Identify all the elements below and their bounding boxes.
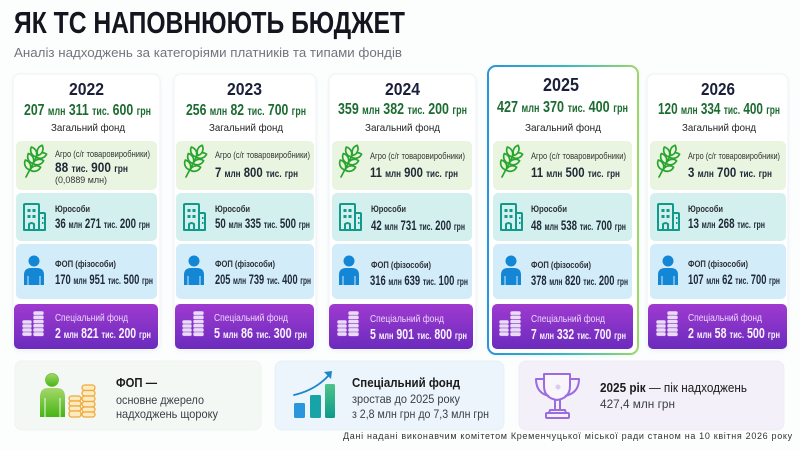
row: legal entities 2025 [493,193,632,241]
row: special fund 2022 [14,304,158,349]
panel: year 2026 [647,74,788,350]
total 2022: 207 млн 311 тис. 600 грн [24,102,151,119]
callout text: Спеціальний фонд [352,376,460,390]
panel: year 2024 [329,74,476,350]
general fund label: Загальний фонд [51,122,125,134]
row: special fund 2026: 2 млн 58 тис. 500 грн [688,325,780,342]
year heading 2024: 2024 [385,79,420,99]
total 2026: 120 млн 334 тис. 400 грн [658,101,780,118]
row: legal entities 2024: Юрособи [371,204,406,215]
row: sole proprietors 2024: ФОП (фізособи) [371,260,431,271]
year heading 2022: 2022 [69,79,104,99]
callout text [600,381,747,411]
callout text: зростав до 2025 року [352,392,460,406]
row: special fund 2026 [648,304,787,349]
row: agro 2026 [650,141,786,190]
row: sole proprietors 2022: ФОП (фізособи) [55,259,116,270]
row: sole proprietors 2023: 205 млн 739 тис. 400 грн [215,271,311,287]
row: agro 2026: 3 млн 700 тис. грн [688,164,772,180]
row: sole proprietors 2023 [176,244,314,299]
callout: 2025 peak [519,361,784,430]
row: special fund 2024: 5 млн 901 тис. 800 грн [370,326,467,343]
general fund label: Загальний фонд [365,122,440,134]
total 2024: 359 млн 382 тис. 200 грн [338,101,467,118]
row: sole proprietors 2025: 378 млн 820 тис. 200 грн [531,272,628,288]
row: sole proprietors 2026: ФОП (фізособи) [688,259,748,270]
callout text [352,376,489,421]
row: special fund 2024: Спеціальний фонд [370,313,444,325]
row: legal entities 2023 [176,193,314,241]
callout text: надходжень щороку [116,407,218,421]
row: sole proprietors 2026 [650,244,786,299]
row: legal entities 2022: 36 млн 271 тис. 200 грн [55,215,150,231]
row: agro 2025: 11 млн 500 тис. грн [531,164,620,180]
row: legal entities 2024: 42 млн 731 тис. 200 грн [371,217,465,233]
year heading 2023: 2023 [227,79,262,99]
row: agro 2022: (0,0889 млн) [55,175,107,186]
row: agro 2024: 11 млн 900 тис. грн [370,164,458,180]
row: sole proprietors 2024: 316 млн 639 тис. 100 грн [370,272,468,288]
row: agro 2023: Агро (с/г товаровиробники) [215,150,310,161]
row: special fund 2025: Спеціальний фонд [531,313,605,325]
total 2025: 427 млн 370 тис. 400 грн [497,99,628,116]
panel: year 2022 [13,74,160,350]
row: legal entities 2022 [16,193,157,241]
icon: person with coins [40,374,95,417]
general fund label: Загальний фонд [209,122,283,134]
row: sole proprietors 2024 [332,244,472,299]
year heading 2025: 2025 [543,74,579,95]
general fund label: Загальний фонд [525,122,601,134]
row: agro 2023 [176,141,314,190]
subtitle: Аналіз надходжень за категоріями платників та типами фондів [14,45,402,60]
callout text [116,376,218,421]
row: sole proprietors 2025: ФОП (фізособи) [531,260,591,271]
total 2023: 256 млн 82 тис. 700 грн [186,102,306,119]
row: agro 2025 [493,141,632,190]
row: legal entities 2026 [650,193,786,241]
row: legal entities 2026: 13 млн 268 тис. грн [688,215,765,231]
row: special fund 2023 [175,304,314,349]
row: sole proprietors 2022: 170 млн 951 тис. 500 грн [55,271,153,287]
icon: trophy [536,374,579,418]
callout text: 427,4 млн грн [600,397,675,411]
row: special fund 2023: Спеціальний фонд [214,312,288,324]
row: agro 2024: Агро (с/г товаровиробники) [370,151,465,162]
row: agro 2024 [332,141,472,190]
source note: Дані надані виконавчим комітетом Кременчуцької міської ради станом на 10 квітня 2026 року [343,431,793,441]
row: legal entities 2026: Юрособи [688,204,723,215]
panel: year 2025 highlighted [488,66,638,354]
row: legal entities 2024 [332,193,472,241]
panel: year 2023 [174,74,316,350]
row: special fund 2022: 2 млн 821 тис. 200 грн [55,325,151,342]
row: sole proprietors 2023: ФОП (фізособи) [215,259,275,270]
row: legal entities 2023: 50 млн 335 тис. 500 грн [215,215,310,231]
row: legal entities 2022: Юрособи [55,204,90,215]
callout: special fund growth [275,361,504,430]
row: agro 2025: Агро (с/г товаровиробники) [531,151,626,162]
row: special fund 2025: 7 млн 332 тис. 700 грн [531,326,626,343]
callout: sole proprietors main source [15,361,261,430]
row: special fund 2024 [329,304,473,349]
general fund label: Загальний фонд [682,122,756,134]
row: agro 2022 [16,141,157,190]
row: sole proprietors 2025 [493,244,632,299]
row: special fund 2023: 5 млн 86 тис. 300 грн [214,325,307,342]
icon: rising bar chart [294,371,335,418]
year heading 2026: 2026 [701,79,735,99]
row: agro 2023: 7 млн 800 тис. грн [215,164,298,180]
callout text: ФОП — [116,376,157,390]
row: legal entities 2025: 48 млн 538 тис. 700 грн [531,217,626,233]
callout text: з 2,8 млн грн до 7,3 млн грн [352,407,489,421]
row: sole proprietors 2022 [16,244,157,299]
row: agro 2022: 88 тис. 900 грн [55,159,128,175]
row: sole proprietors 2026: 107 млн 62 тис. 700 грн [688,271,780,287]
row: special fund 2026: Спеціальний фонд [688,312,762,324]
callout text: 2025 рік — пік надходжень [600,381,747,395]
title: ЯК ТС НАПОВНЮЮТЬ БЮДЖЕТ [14,5,405,40]
callout text: основне джерело [116,393,204,407]
row: agro 2022: Агро (с/г товаровиробники) [55,149,150,160]
row: special fund 2022: Спеціальний фонд [55,312,128,324]
row: legal entities 2023: Юрособи [215,204,250,215]
row: special fund 2025 [492,304,633,349]
row: legal entities 2025: Юрособи [531,204,567,215]
